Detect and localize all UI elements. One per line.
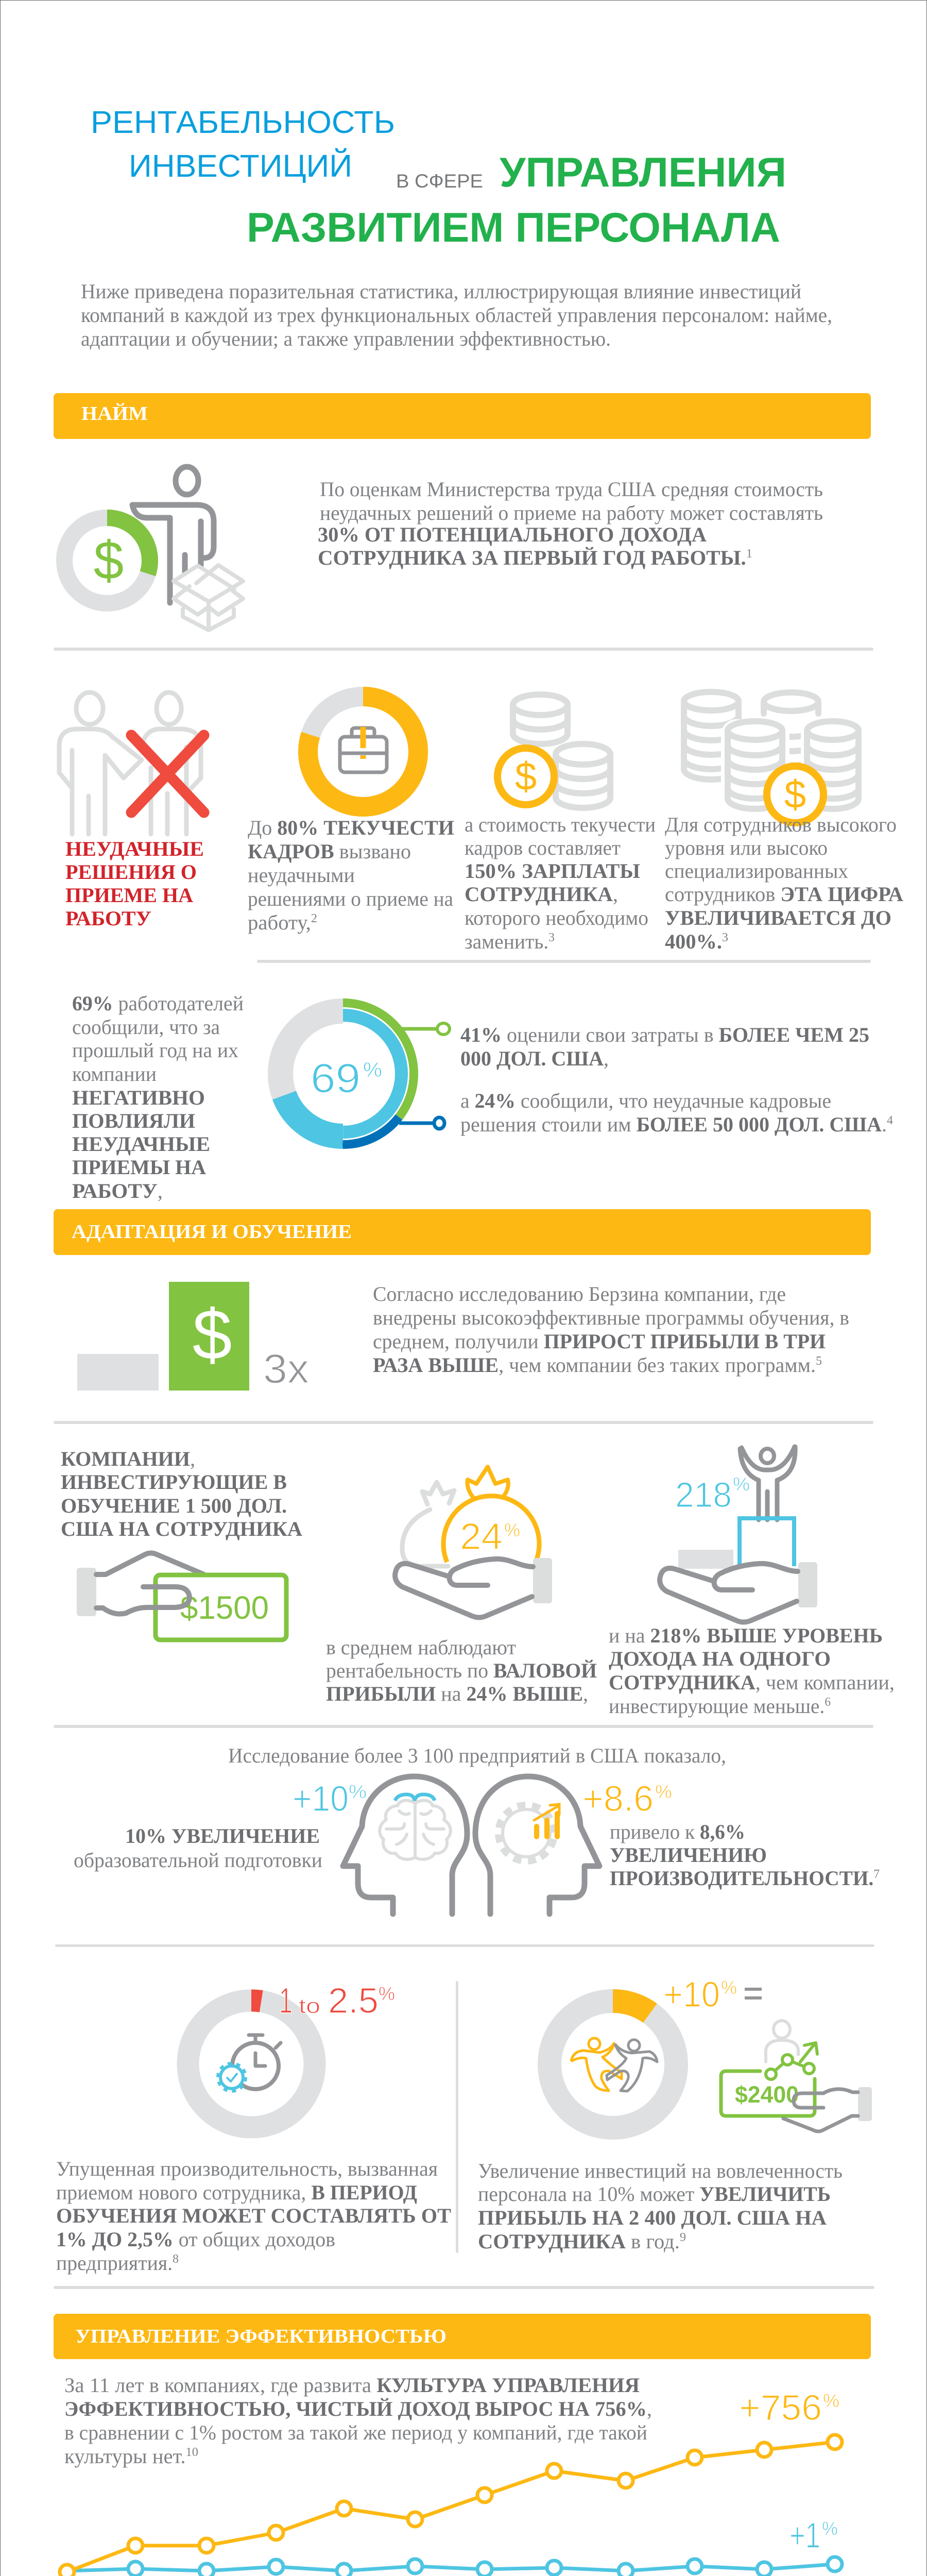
text: bad hiring decisions: РЕШЕНИЯ О [65, 860, 197, 884]
text: performance culture: в сравнении с 1% ростом за такой же период у компаний, где такой [64, 2421, 647, 2444]
text: 24% gross margin: рентабельность по ВАЛОВОЙ [326, 1659, 597, 1682]
text: 8.6% productivity: привело к 8,6% [610, 1820, 745, 1843]
icon: $2400 per employee: $2400 [735, 2081, 799, 2108]
text: senior staff 400%: уровня или высоко [665, 836, 828, 859]
text: lost productivity: Упущенная производительность, вызванная [56, 2157, 438, 2180]
text: 10% more training: образовательной подготовки [74, 1849, 322, 1872]
text: bad hiring decisions [65, 837, 204, 930]
intro text: компаний в каждой из трех функциональных областей управления персоналом: найме, [81, 303, 832, 327]
title: РЕНТАБЕЛЬНОСТЬ [91, 105, 395, 140]
text: lost productivity: ОБУЧЕНИЯ МОЖЕТ СОСТАВЛЯТЬ ОТ [56, 2204, 451, 2227]
donut chart: 80% with briefcase [308, 697, 418, 807]
text: performance culture: За 11 лет в компаниях, где развита КУЛЬТУРА УПРАВЛЕНИЯ [64, 2374, 640, 2397]
icon: handshake crossed out [59, 692, 204, 834]
bar icon: 3x profit: 3x [263, 1346, 309, 1392]
text: 218% revenue per employee: и на 218% ВЫШЕ УРОВЕНЬ [609, 1624, 883, 1647]
text: 69% employers: компании [72, 1062, 157, 1086]
text: 69% employers: прошлый год на их [72, 1039, 238, 1062]
donut chart: 69% [272, 1003, 450, 1145]
icon: money bags on a hand, 24%: % [504, 1519, 520, 1540]
icon: person rising from box on a hand, 218%: % [733, 1473, 750, 1495]
text: lost productivity: предприятия. [56, 2251, 173, 2275]
text: engagement investment: СОТРУДНИКА в год. [478, 2230, 679, 2253]
text: lost productivity [56, 2157, 451, 2275]
donut chart: lost productivity 1 to 2.5%: % [379, 1983, 395, 2004]
donut chart: 69%: 69 [311, 1055, 360, 1101]
stat: +756%: +756 [739, 2387, 822, 2428]
text: performance culture: ЭФФЕКТИВНОСТЬЮ, ЧИСТЫЙ ДОХОД ВЫРОС НА 756%, [64, 2397, 652, 2420]
text: 150% salary: заменить. [465, 930, 550, 953]
text: 8.6% productivity: ПРОИЗВОДИТЕЛЬНОСТИ. [610, 1867, 879, 1890]
text: companies investing $1500: ИНВЕСТИРУЮЩИЕ В [61, 1470, 287, 1494]
text: Bersin research [373, 1282, 849, 1377]
text: 69% employers: НЕУДАЧНЫЕ [72, 1132, 210, 1156]
text: 80% turnover: До 80% ТЕКУЧЕСТИ [248, 816, 454, 839]
icon: coin stacks with dollar coin: $ [515, 755, 537, 799]
text: engagement investment: Увеличение инвестиций на вовлеченность [478, 2159, 843, 2182]
icon: $2400 per employee [721, 2021, 872, 2131]
line chart: net income growth [60, 2435, 842, 2576]
text: 69% employers: 69% работодателей [72, 992, 244, 1015]
icon: money bags on a hand, 24%: 24 [460, 1516, 503, 1557]
text: cost of bad hire: неудачных решений о приеме на работу может составлять [320, 501, 823, 524]
text: 41% and 24% costs: 41% оценили свои затраты в БОЛЕЕ ЧЕМ 25 [460, 1023, 869, 1046]
text: senior staff 400%: сотрудников ЭТА ЦИФРА [665, 883, 903, 906]
text: senior staff 400%: Для сотрудников высокого [665, 813, 897, 836]
text: engagement investment [478, 2159, 843, 2253]
text: Bersin research: среднем, получили ПРИРОСТ ПРИБЫЛИ В ТРИ [373, 1330, 826, 1353]
text: senior staff 400%: 3 [722, 931, 728, 944]
text: Bersin research: Согласно исследованию Берзина компании, где [373, 1282, 786, 1306]
text: cost of bad hire: 1 [746, 547, 752, 561]
text: 218% revenue per employee: 6 [825, 1696, 831, 1709]
section band: performance management: УПРАВЛЕНИЕ ЭФФЕКТИВНОСТЬЮ [75, 2326, 447, 2347]
stat: +8.6%: % [655, 1781, 672, 1802]
text: 8.6% productivity [610, 1820, 880, 1890]
text: study of 3100 businesses: Исследование более 3 100 предприятий в США показало, [228, 1744, 726, 1767]
text: companies investing $1500: ОБУЧЕНИЕ 1 500 ДОЛ. [61, 1494, 287, 1517]
text: 24% gross margin: в среднем наблюдают [326, 1636, 516, 1659]
text: engagement investment: 9 [680, 2231, 686, 2244]
icon: person rising from box on a hand, 218% [660, 1447, 817, 1622]
text: 80% turnover: неудачными [248, 863, 355, 887]
text: 8.6% productivity: 7 [873, 1868, 880, 1881]
text: Bersin research: РАЗА ВЫШЕ, чем компании без таких программ. [373, 1353, 815, 1377]
text: performance culture: 10 [186, 2446, 198, 2459]
text: Bersin research: 5 [816, 1354, 822, 1368]
text: bad hiring decisions: ПРИЕМЕ НА [65, 884, 193, 907]
text: companies investing $1500: США НА СОТРУДНИКА [61, 1517, 302, 1540]
text: 80% turnover [248, 816, 454, 934]
text: lost productivity: 1% ДО 2,5% от общих доходов [56, 2228, 335, 2251]
text: 41% and 24% costs: решения стоили им БОЛЕЕ 50 000 ДОЛ. США. [460, 1113, 887, 1136]
text: 24% gross margin [326, 1636, 597, 1705]
stat: +1%: +1 [789, 2515, 820, 2555]
text: 150% salary: СОТРУДНИКА, [465, 883, 618, 906]
text: 10% more training [74, 1824, 322, 1872]
intro text [81, 280, 832, 350]
stat: +10% = [663, 1974, 762, 2014]
text: 69% employers [72, 992, 244, 1202]
stat: +756%: % [823, 2390, 839, 2411]
text: senior staff 400%: 400%. [665, 930, 722, 953]
text: 218% revenue per employee: СОТРУДНИКА, чем компании, [609, 1671, 895, 1694]
stat: +10%: +10 [293, 1778, 349, 1819]
section band: performance management [54, 2314, 871, 2359]
text: 24% gross margin: ПРИБЫЛИ на 24% ВЫШЕ, [326, 1682, 588, 1705]
text: senior staff 400% [665, 813, 903, 953]
title: ИНВЕСТИЦИЙ [129, 148, 352, 183]
text: senior staff 400%: УВЕЛИЧИВАЕТСЯ ДО [665, 906, 891, 929]
stat: +10% =: % [721, 1977, 737, 1998]
text: 41% and 24% costs [460, 1023, 893, 1136]
text: senior staff 400%: специализированных [665, 859, 848, 883]
section band: hiring [54, 393, 871, 439]
bar icon: 3x profit [77, 1282, 309, 1392]
icon: many coin stacks with dollar coin [684, 692, 865, 823]
text: 69% employers: ПРИЕМЫ НА [72, 1156, 206, 1179]
text: 218% revenue per employee [609, 1624, 895, 1718]
text: 150% salary: а стоимость текучести [465, 813, 656, 836]
icon: money bags on a hand, 24% [395, 1467, 552, 1618]
text: 69% employers: РАБОТУ, [72, 1179, 163, 1202]
text: 69% employers: сообщили, что за [72, 1015, 220, 1039]
stat: +10% =: +10 [663, 1974, 720, 2014]
text: 80% turnover: решениями о приеме на [248, 887, 453, 910]
icon: coin stacks with dollar coin [497, 694, 610, 808]
text: 80% turnover: работу, [248, 911, 310, 934]
text: 150% salary: которого необходимо [465, 906, 648, 929]
text: 10% more training: 10% УВЕЛИЧЕНИЕ [125, 1824, 320, 1848]
text: 80% turnover: 2 [311, 912, 317, 925]
stat: +10%: % [349, 1781, 367, 1802]
text: 150% salary: 3 [548, 931, 555, 944]
text: performance culture: культуры нет. [64, 2445, 183, 2468]
text: cost of bad hire: 30% ОТ ПОТЕНЦИАЛЬНОГО ДОХОДА [318, 523, 707, 546]
donut chart: lost productivity 1 to 2.5%: 1 [279, 1980, 293, 2021]
text: Bersin research: внедрены высокоэффективные программы обучения, в [373, 1306, 849, 1329]
text: engagement investment: персонала на 10% может УВЕЛИЧИТЬ [478, 2182, 831, 2206]
text: lost productivity: приемом нового сотрудника, В ПЕРИОД [56, 2181, 417, 2204]
section band: onboarding and training [54, 1209, 871, 1255]
stat: +8.6%: +8.6 [582, 1778, 654, 1819]
text: cost of bad hire [318, 478, 823, 569]
donut chart: +10% engagement with handshake [550, 2001, 676, 2128]
donut chart: lost productivity 1 to 2.5%: to [299, 1995, 320, 2018]
icon: person, donut 30% and box [64, 467, 243, 630]
text: bad hiring decisions: НЕУДАЧНЫЕ [65, 837, 204, 860]
text: 41% and 24% costs: а 24% сообщили, что неудачные кадровые [460, 1089, 831, 1112]
title [91, 105, 786, 251]
text: 69% employers: ПОВЛИЯЛИ [72, 1109, 195, 1132]
text: 218% revenue per employee: ДОХОДА НА ОДНОГО [609, 1647, 831, 1670]
icon: two heads with brain and gear [343, 1776, 599, 1914]
text: 69% employers: НЕГАТИВНО [72, 1086, 205, 1109]
text: 150% salary: кадров составляет [465, 836, 621, 859]
text: cost of bad hire: По оценкам Министерства труда США средняя стоимость [320, 478, 823, 501]
icon: person, donut 30% and box: $ [94, 531, 124, 591]
text: 150% salary [465, 813, 656, 953]
icon: hand holding $1500 banknote [77, 1553, 286, 1640]
text: cost of bad hire: СОТРУДНИКА ЗА ПЕРВЫЙ ГОД РАБОТЫ. [318, 546, 737, 569]
intro text: адаптации и обучении; а также управлении эффективностью. [81, 327, 611, 350]
text: performance culture [64, 2374, 652, 2468]
text: 150% salary: 150% ЗАРПЛАТЫ [465, 859, 640, 883]
icon: many coin stacks with dollar coin: $ [784, 773, 806, 817]
title: УПРАВЛЕНИЯ [500, 149, 786, 196]
icon: person rising from box on a hand, 218%: 218 [675, 1475, 732, 1515]
text: companies investing $1500: КОМПАНИИ, [61, 1447, 195, 1470]
section band: onboarding and training: АДАПТАЦИЯ И ОБУЧЕНИЕ [72, 1221, 352, 1243]
text: 218% revenue per employee: инвестирующие меньше. [609, 1694, 829, 1718]
title: РАЗВИТИЕМ ПЕРСОНАЛА [247, 205, 780, 251]
text: 41% and 24% costs: 000 ДОЛ. США, [460, 1047, 609, 1070]
text: engagement investment: ПРИБЫЛЬ НА 2 400 ДОЛ. США НА [478, 2206, 827, 2229]
text: 41% and 24% costs: 4 [887, 1114, 893, 1127]
text: 8.6% productivity: УВЕЛИЧЕНИЮ [610, 1843, 767, 1867]
text: 80% turnover: КАДРОВ вызвано [248, 840, 411, 863]
section band: hiring: НАЙМ [81, 403, 148, 425]
text: companies investing $1500 [61, 1447, 302, 1540]
icon: hand holding $1500 banknote: $1500 [180, 1590, 269, 1626]
text: lost productivity: 8 [173, 2252, 179, 2266]
title: В СФЕРЕ [396, 171, 483, 192]
text: bad hiring decisions: РАБОТУ [65, 907, 151, 930]
donut chart: 69%: % [363, 1059, 382, 1081]
donut chart: lost productivity 1 to 2.5% [188, 1980, 395, 2127]
donut chart: lost productivity 1 to 2.5%: 2.5 [328, 1980, 379, 2021]
bar icon: 3x profit: $ [193, 1295, 232, 1375]
stat: +1%: % [822, 2518, 838, 2539]
intro text: Ниже приведена поразительная статистика, иллюстрирующая влияние инвестиций [81, 280, 801, 303]
